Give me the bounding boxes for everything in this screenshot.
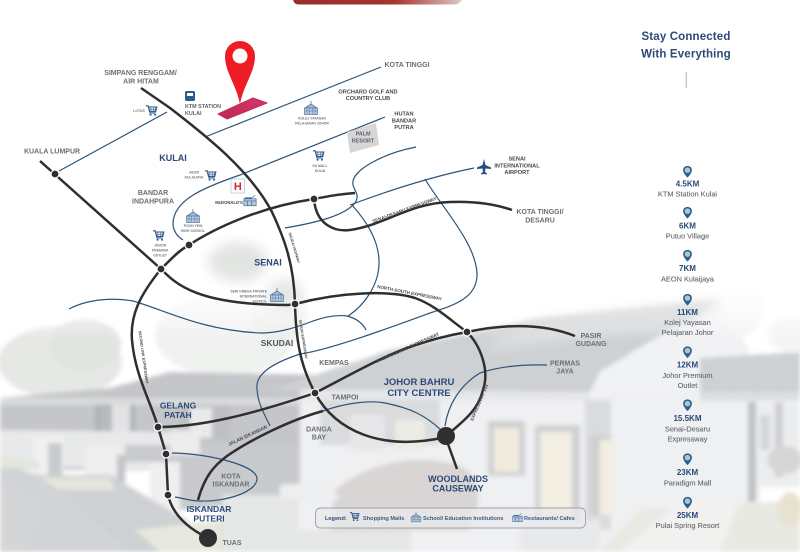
palm resort block: RESORT xyxy=(352,138,375,144)
place labels: south: SKUDAI xyxy=(261,338,293,348)
ground right xyxy=(600,500,800,552)
McDonald's: McDONALD'S xyxy=(215,200,243,205)
place labels: north: INTERNATIONAL xyxy=(494,164,540,170)
place labels: north: KOTA TINGGI/ xyxy=(516,209,564,216)
expressway labels: PASIR GUDANG EXPRESSWAY xyxy=(375,332,440,364)
place labels: north: KOTA TINGGI xyxy=(384,62,430,69)
expressway labels: SKUDAI HIGHWAY xyxy=(288,232,301,264)
left: building xyxy=(0,372,340,470)
distance list xyxy=(656,166,719,530)
place labels: south: KEMPAS xyxy=(319,360,349,367)
Seri Omega: SCHOOL xyxy=(252,300,267,304)
item: Kolej Yayasan xyxy=(662,294,714,337)
legend: Restaurants/ Cafes xyxy=(524,516,575,522)
item: AEON Kulaijaya: 7KM xyxy=(679,264,696,273)
place labels: south: CITY CENTRE xyxy=(387,388,451,399)
place labels: north: INDAHPURA xyxy=(132,198,174,206)
hospital xyxy=(231,179,244,193)
McDonald's xyxy=(215,195,256,206)
item: KTM Station Kulai: KTM Station Kulai xyxy=(658,190,717,198)
item: Kolej Yayasan: Pelajaran Johor xyxy=(662,328,714,337)
item: Pulai Spring Resort xyxy=(656,497,719,530)
Kolej Yayasan: KOLEJ YAYASAN xyxy=(298,116,326,120)
item: AEON Kulaijaya: AEON Kulaijaya xyxy=(661,274,715,284)
legend xyxy=(316,508,586,528)
porch xyxy=(748,402,756,502)
item: Senai-Desaru Expressway xyxy=(665,399,710,444)
place labels: south: PASIR xyxy=(581,333,601,340)
blue secondary roads xyxy=(59,67,547,501)
Poon Yew: HIGH SCHOOL xyxy=(181,229,205,233)
place labels: south: JAYA xyxy=(556,368,574,376)
place labels: south xyxy=(159,153,607,547)
Poon Yew xyxy=(181,209,205,233)
place labels: north: SIMPANG RENGGAM/ xyxy=(104,70,177,77)
item: Pulai Spring Resort: 25KM xyxy=(677,511,699,520)
heading xyxy=(641,31,731,60)
legend: Shopping Malls xyxy=(363,516,404,522)
place labels: south: PERMAS xyxy=(550,360,580,368)
item: Johor Premium Outlet xyxy=(662,346,713,390)
item: Johor Premium Outlet: Outlet xyxy=(678,381,697,390)
place labels: north: AIRPORT xyxy=(504,170,530,176)
Johor Premium Outlet: JOHOR xyxy=(154,244,167,248)
main house wall xyxy=(300,385,760,552)
fence xyxy=(222,495,300,552)
item: KTM Station Kulai: 4.5KM xyxy=(676,180,700,188)
expressway labels: SENAI-DESARU EXPRESSWAY xyxy=(372,196,437,224)
place labels: south: TUAS xyxy=(222,540,242,547)
item: Senai-Desaru Expressway: Senai-Desaru xyxy=(665,424,710,434)
left: trees xyxy=(0,326,122,398)
Johor Premium Outlet: PREMIUM xyxy=(152,248,168,252)
item: Johor Premium Outlet: Johor Premium xyxy=(662,371,713,380)
expressway labels: SECOND LINK EXPRESSWAY xyxy=(138,331,149,385)
place labels: south: PATAH xyxy=(164,410,192,420)
place labels: north: DESARU xyxy=(525,218,555,224)
item: Senai-Desaru Expressway: 15.5KM xyxy=(673,414,702,423)
legend: School/ Education Institutions xyxy=(423,516,504,522)
item: AEON Kulaijaya xyxy=(661,250,715,284)
AEON: AEON xyxy=(189,170,199,174)
place labels: north: SENAI xyxy=(508,156,526,162)
place labels: south: CAUSEWAY xyxy=(432,484,484,494)
place labels: south: WOODLANDS xyxy=(428,474,488,484)
Johor Premium Outlet: OUTLET xyxy=(153,254,168,258)
item: Putuo Village: Putuo Village xyxy=(666,232,709,240)
place labels: north: PUTRA xyxy=(394,125,414,131)
place labels: north: AIR HITAM xyxy=(123,78,159,86)
place labels: south: GELANG xyxy=(160,400,197,410)
place labels: south: ISKANDAR xyxy=(187,504,231,514)
Seri Omega: INTERNATIONAL xyxy=(240,294,267,298)
palm resort block xyxy=(347,123,379,153)
roof xyxy=(270,298,722,392)
IOI Mall: IOI MALL xyxy=(313,164,327,168)
expressway labels: SKUDAI EXPRESSWAY xyxy=(298,320,308,360)
item: Kolej Yayasan: Kolej Yayasan xyxy=(664,318,711,327)
place labels: south: DANGA xyxy=(306,426,332,434)
left: garages xyxy=(0,430,170,470)
item: Kolej Yayasan: 11KM xyxy=(677,308,698,317)
heading: Stay Connected xyxy=(641,31,731,43)
hospital: H xyxy=(234,181,242,193)
Seri Omega xyxy=(230,288,284,304)
legend: Legend: xyxy=(325,516,347,522)
item: Putuo Village xyxy=(666,207,709,240)
expressway labels: NORTH-SOUTH EXPRESSWAY xyxy=(377,284,442,301)
place labels: south: TAMPOI xyxy=(332,394,358,402)
place labels: south: SENAI xyxy=(254,258,282,268)
Poon Yew: POON YEW xyxy=(184,224,203,228)
item: Pulai Spring Resort: Pulai Spring Resort xyxy=(656,521,719,530)
heading: With Everything xyxy=(641,48,731,60)
palm resort block: PALM xyxy=(356,132,371,138)
place labels: north: BANDAR xyxy=(392,118,416,124)
place labels: south: BAY xyxy=(312,434,326,442)
Seri Omega: SERI OMEGA PRIVATE xyxy=(230,290,268,294)
item: Paradigm Mall xyxy=(664,453,711,488)
Lotus xyxy=(133,106,157,116)
KTM station: KTM STATION xyxy=(185,104,221,110)
icon: location pin and plot xyxy=(218,41,267,119)
icon: airplane xyxy=(477,159,491,174)
IOI Mall: KULAI xyxy=(315,169,325,173)
place labels: south: KOTA xyxy=(221,474,241,480)
expressway labels xyxy=(138,196,489,448)
junction dots xyxy=(51,170,471,547)
ground xyxy=(0,465,130,552)
place labels: north: HUTAN xyxy=(394,112,414,118)
expressway labels: JALAN ISKANDAR xyxy=(227,424,269,448)
place labels: north xyxy=(24,62,564,224)
place labels: south: ISKANDAR xyxy=(213,482,249,488)
place labels: north: BANDAR xyxy=(138,190,168,197)
AEON xyxy=(185,170,216,181)
place labels: north: ORCHARD GOLF AND xyxy=(338,90,398,96)
item: KTM Station Kulai xyxy=(658,166,717,198)
Johor Premium Outlet xyxy=(152,231,168,258)
IOI Mall xyxy=(313,151,327,173)
Kolej Yayasan: PELAJARAN JOHOR xyxy=(295,122,329,126)
item: Senai-Desaru Expressway: Expressway xyxy=(668,434,708,444)
place labels: south: KULAI xyxy=(159,153,187,163)
item: Putuo Village: 6KM xyxy=(679,222,696,230)
Kolej Yayasan xyxy=(295,101,329,126)
place labels: south: JOHOR BAHRU xyxy=(384,377,454,388)
car xyxy=(330,460,478,530)
place labels: south: GUDANG xyxy=(575,341,607,348)
expressway labels: EXPRESSWAY 103 xyxy=(469,383,489,421)
place labels: south: PUTERI xyxy=(193,514,225,524)
Lotus: LOTUS xyxy=(133,109,145,113)
item: Johor Premium Outlet: 12KM xyxy=(677,360,699,370)
KTM station: KULAI xyxy=(185,111,202,117)
item: Paradigm Mall: Paradigm Mall xyxy=(664,478,711,488)
AEON: KULAIJAYA xyxy=(185,176,204,180)
dark expressways xyxy=(40,88,575,538)
windows xyxy=(488,421,525,476)
KTM station xyxy=(185,91,221,117)
place labels: north: KUALA LUMPUR xyxy=(24,148,80,156)
item: Paradigm Mall: 23KM xyxy=(677,468,699,477)
place labels: north: COUNTRY CLUB xyxy=(346,96,390,102)
